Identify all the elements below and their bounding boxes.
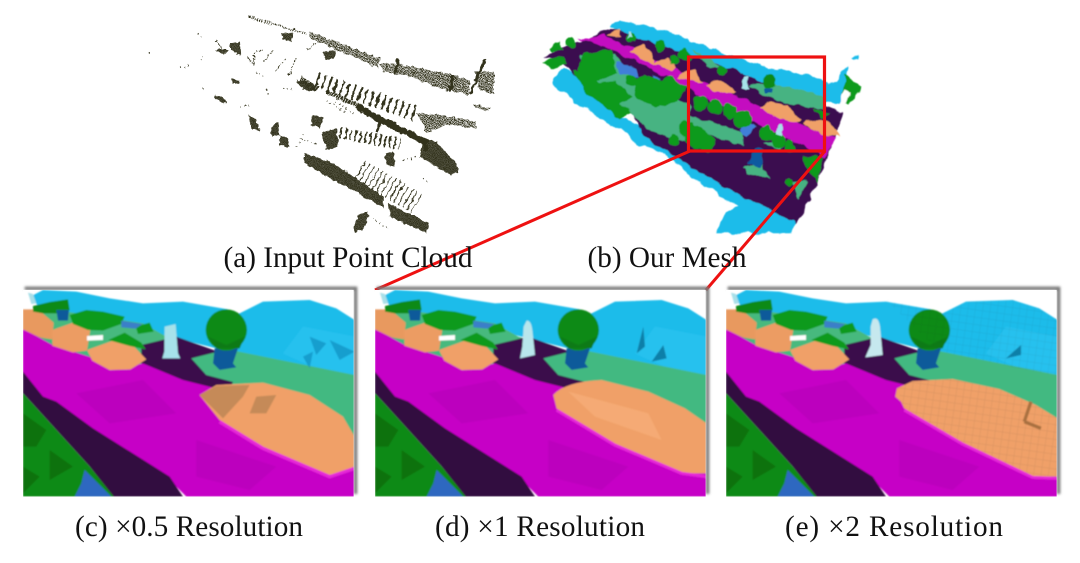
red zoom box and leader lines xyxy=(375,57,825,290)
orange dome, faceted xyxy=(200,383,355,477)
white notch and towers xyxy=(628,31,858,135)
orange hills xyxy=(608,31,840,137)
panel: input point cloud xyxy=(149,17,494,233)
sparse dots xyxy=(149,33,429,228)
green vegetation xyxy=(543,33,862,187)
tower xyxy=(865,319,883,357)
middle hatched band xyxy=(300,78,477,175)
caption: our mesh: (b) Our Mesh xyxy=(588,242,747,274)
caption: half resolution: (c) ×0.5 Resolution xyxy=(75,511,303,543)
tower xyxy=(520,321,535,358)
orange dome, smooth xyxy=(553,380,707,477)
lower hatched band xyxy=(305,133,428,233)
panel: our mesh xyxy=(543,20,862,233)
caption: input point cloud: (a) Input Point Cloud xyxy=(224,242,473,274)
panel: double resolution render xyxy=(726,288,1059,497)
orange dome, gridded xyxy=(895,379,1058,478)
scattered clusters xyxy=(215,33,395,233)
panel: full resolution render xyxy=(375,288,708,497)
panel: half resolution render xyxy=(23,288,356,497)
mesh body xyxy=(543,20,849,233)
tower xyxy=(162,324,180,358)
caption: full resolution: (d) ×1 Resolution xyxy=(435,511,645,543)
caption: double resolution: (e) ×2 Resolution xyxy=(785,511,1003,543)
top hatched band xyxy=(248,17,494,112)
